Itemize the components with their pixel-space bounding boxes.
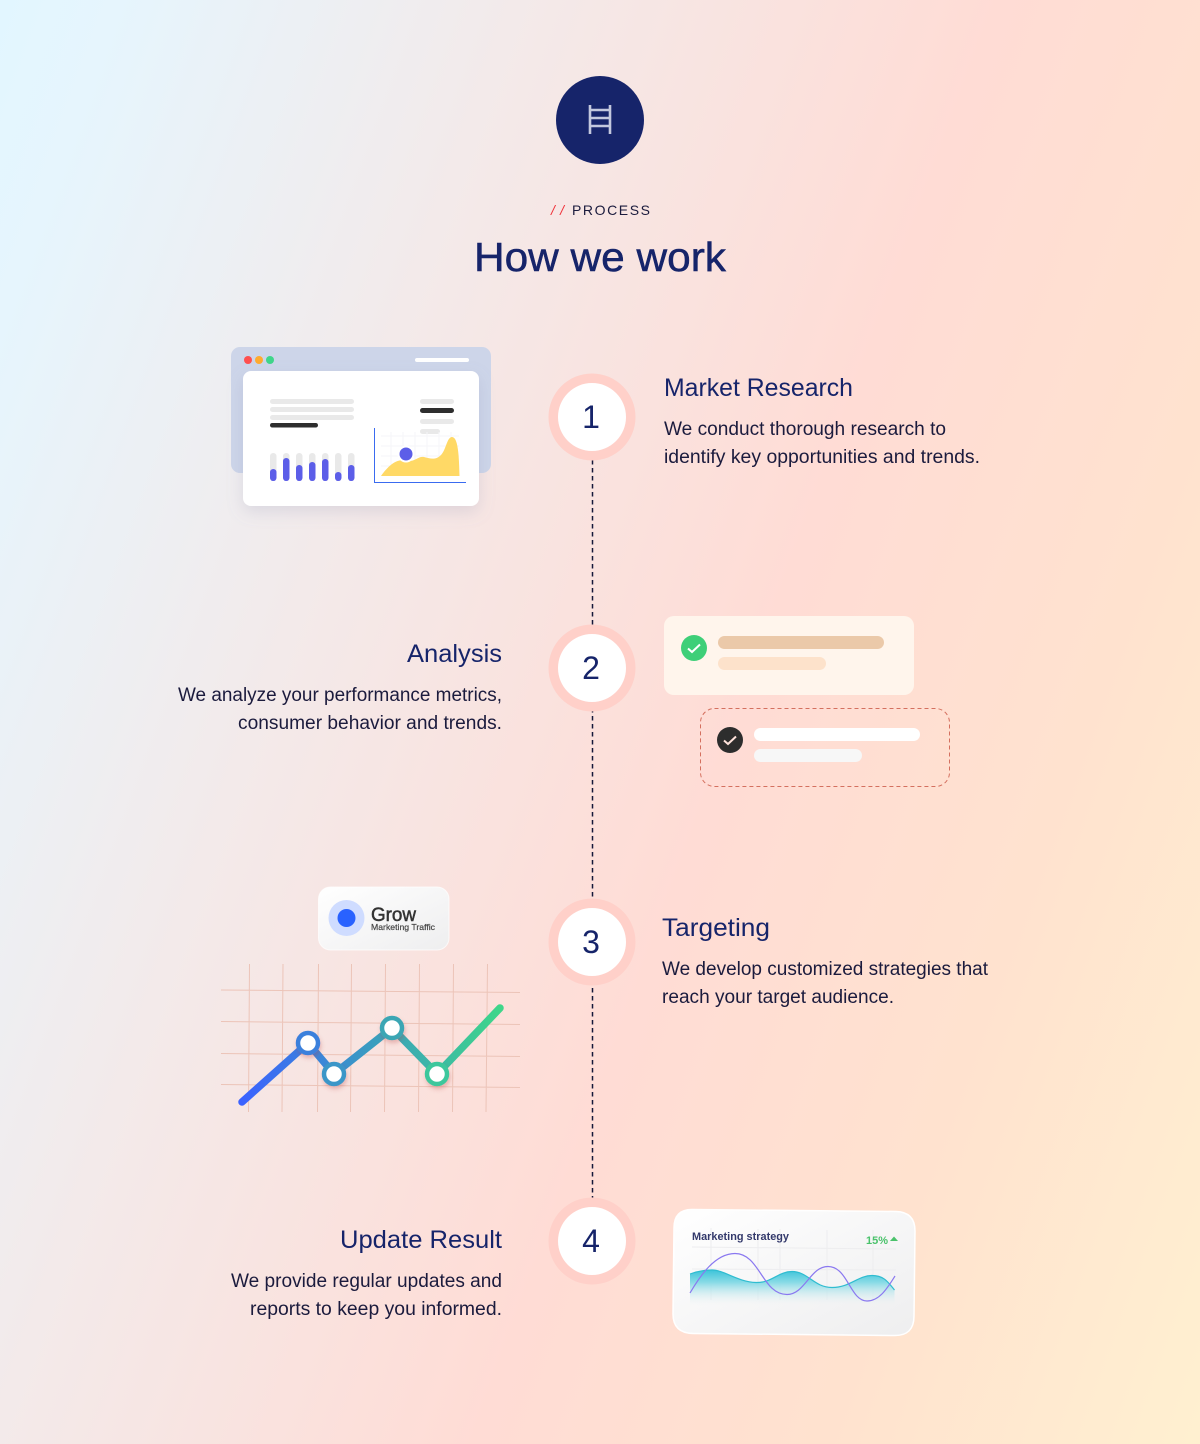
illustration: checklist cards [664, 616, 950, 786]
step 2 marker: 2 [582, 650, 600, 686]
step 3 marker: 3 [582, 924, 600, 960]
step 4 text: update result [231, 1226, 502, 1320]
step 4 text: update result: Update Result [340, 1226, 502, 1254]
step 4 marker: 4 [582, 1223, 600, 1259]
step 1 marker: 1 [582, 399, 600, 435]
step 3 text: targeting [662, 914, 989, 1008]
eyebrow: process: PROCESS [572, 202, 650, 218]
step 3 text: targeting: Targeting [662, 914, 770, 942]
step 3 marker [548, 898, 636, 986]
step 1 text: market research: identify key opportunities and trends. [664, 447, 980, 468]
step 2 text: analysis: consumer behavior and trends. [238, 713, 502, 734]
illustration: grow label card [318, 887, 449, 950]
step 4 text: update result: reports to keep you informed. [250, 1299, 502, 1320]
illustration: grow label card: Grow [371, 905, 416, 926]
step 2 text: analysis: Analysis [407, 640, 502, 668]
step 2 marker [548, 624, 636, 712]
step 1 text: market research [664, 374, 980, 468]
step 1 marker [548, 374, 636, 460]
title: How we work [474, 234, 727, 280]
step 1 text: market research: Market Research [664, 374, 853, 402]
illustration: marketing strategy chart card: 15% [866, 1235, 888, 1247]
step 2 text: analysis: We analyze your performance metrics, [178, 685, 502, 706]
step 4 marker [548, 1198, 636, 1284]
illustration: marketing strategy chart card [673, 1210, 915, 1336]
illustration: marketing strategy chart card: Marketing strategy [692, 1231, 790, 1243]
step 2 text: analysis [178, 640, 502, 734]
step 3 text: targeting: reach your target audience. [662, 987, 894, 1008]
icon: ladder badge [556, 76, 644, 164]
step 4 text: update result: We provide regular updates and [231, 1271, 502, 1292]
illustration: dashboard window [231, 347, 491, 506]
illustration: grow label card: Marketing Traffic [371, 922, 436, 932]
timeline connector [592, 460, 594, 1200]
line chart: growth [221, 964, 520, 1112]
eyebrow: process: // [550, 202, 566, 218]
step 3 text: targeting: We develop customized strategies that [662, 959, 989, 980]
step 1 text: market research: We conduct thorough research to [664, 419, 946, 440]
